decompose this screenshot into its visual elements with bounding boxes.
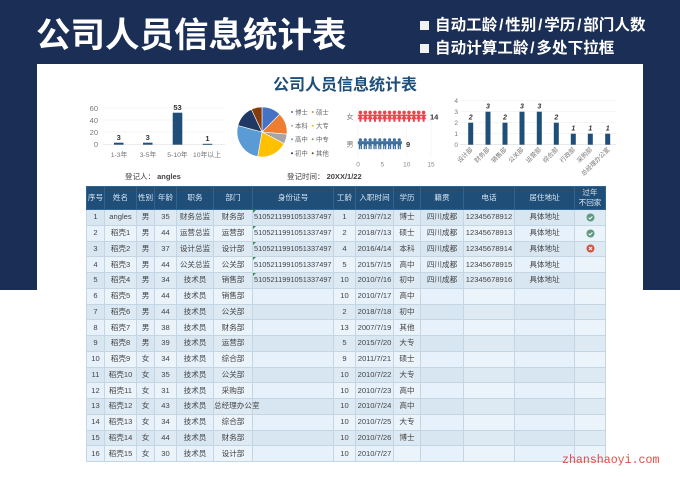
row 9: 2015/7/20 [358, 338, 391, 347]
chart: years of service bar chart: 60 [90, 104, 98, 113]
row 6: 2010/7/17 [358, 291, 391, 300]
table header row: 居住地址 [529, 193, 560, 202]
row 1: 1 [342, 212, 347, 221]
row 6: 销售部 [222, 291, 244, 300]
row 5: 技术员 [184, 275, 206, 284]
row 2: 运营总监 [180, 228, 210, 237]
row 12: 12 [91, 386, 100, 395]
chart: department headcount bars: 公关部 [507, 146, 525, 165]
row 14: 女 [142, 417, 149, 426]
row 10: 综合部 [222, 354, 244, 363]
row 2: 2 [342, 228, 347, 237]
row 13 [87, 399, 605, 414]
navy header background [0, 0, 680, 290]
table header row: 入职时间 [359, 193, 390, 202]
row 15: 44 [161, 433, 170, 442]
row 8: 财务部 [222, 323, 244, 332]
row 2: 5105211991051337497 [254, 228, 332, 237]
chart: department headcount bars: 总经理办公室 [580, 146, 611, 178]
chart: department headcount bars: 3 [520, 104, 524, 110]
row 7: 44 [161, 307, 170, 316]
row 4: 四川成都 [427, 260, 457, 269]
row 8 [87, 320, 605, 335]
row 14: 大专 [399, 417, 415, 426]
row 3: 男 [142, 244, 149, 253]
row 6: 6 [93, 291, 98, 300]
row 13: 13 [91, 401, 100, 410]
table header row: 籍贯 [434, 193, 450, 202]
row 3: 12345678914 [466, 244, 512, 253]
row 16 [87, 446, 605, 461]
row 3: 四川成都 [427, 244, 457, 253]
row 6: 男 [142, 291, 149, 300]
row 11: 公关部 [222, 370, 244, 379]
chart: department headcount bars: 2 [468, 114, 473, 122]
row 11: 11 [92, 370, 99, 379]
row 1: 2019/7/12 [358, 212, 391, 221]
row 12: 31 [161, 386, 170, 395]
row 15: 稻壳14 [109, 433, 132, 442]
row 7: 男 [142, 307, 149, 316]
row 4: 男 [142, 260, 149, 269]
row 14: 稻壳13 [109, 417, 132, 426]
row 3: 3 [93, 244, 98, 253]
row 12 [87, 383, 605, 398]
chart: years of service bar chart: 40 [90, 116, 98, 125]
row 5: 34 [161, 275, 170, 284]
row 11: 技术员 [184, 370, 206, 379]
row 10: 稻壳9 [111, 354, 130, 363]
row 16: 10 [340, 449, 349, 458]
table header row: 工龄 [337, 193, 352, 202]
pie legend [291, 107, 329, 158]
row 1: 具体地址 [529, 212, 560, 221]
row 13: 高中 [399, 401, 415, 410]
row 8: 2007/7/19 [358, 323, 391, 332]
row 10: 34 [161, 354, 170, 363]
row 15: 10 [340, 433, 349, 442]
white sheet panel [37, 64, 643, 477]
row 14: 34 [161, 417, 170, 426]
row 7: 公关部 [222, 307, 244, 316]
chart: department headcount bars: 综合部 [541, 146, 560, 165]
row 7: 初中 [399, 307, 415, 316]
row 8: 其他 [399, 323, 415, 332]
row 1 [87, 210, 605, 225]
row 4: 稻壳3 [111, 260, 130, 269]
chart: years of service bar chart: 1-3年 [111, 150, 128, 159]
row 2: 四川成都 [427, 228, 457, 237]
row 9: 男 [142, 338, 149, 347]
chart: department headcount bars: 3 [454, 109, 458, 116]
row 5 [87, 273, 605, 288]
row 6 [87, 289, 605, 304]
row 10 [87, 352, 605, 367]
row 2: 12345678913 [466, 228, 512, 237]
table header row: 过年 [582, 188, 598, 197]
row 13: 技术员 [184, 401, 206, 410]
row 4: 高中 [399, 260, 415, 269]
chart: department headcount bars: 1 [454, 131, 458, 138]
pie legend: 其他 [316, 149, 329, 158]
row 11 [87, 368, 605, 382]
row 3: 设计总监 [180, 244, 210, 253]
row 9: 5 [342, 338, 347, 347]
table header row: 不回家 [579, 198, 601, 207]
row 3: 具体地址 [529, 244, 560, 253]
chart: education pie [237, 107, 287, 157]
row 9: 稻壳8 [111, 338, 130, 347]
row 2: 44 [161, 228, 170, 237]
chart: department headcount bars: 2 [553, 114, 558, 122]
row 1: 5105211991051337497 [254, 212, 332, 221]
row 5: 稻壳4 [111, 275, 130, 284]
pie legend: 硕士 [316, 107, 329, 116]
chart: years of service bar chart: 3-5年 [140, 150, 157, 159]
row 8: 技术员 [184, 323, 206, 332]
row 2: 稻壳1 [111, 228, 130, 237]
row 16: 稻壳15 [109, 449, 132, 458]
chart: years of service bar chart [90, 103, 225, 159]
row 9: 9 [93, 338, 98, 347]
row 7: 稻壳6 [111, 307, 130, 316]
row 11: 大专 [399, 370, 415, 379]
row 2 [87, 226, 605, 241]
row 12: 高中 [399, 386, 415, 395]
row 16: 30 [161, 449, 170, 458]
chart: department headcount bars: 1 [606, 126, 610, 132]
table header row: 部门 [225, 193, 241, 202]
row 6: 10 [340, 291, 349, 300]
row 10: 技术员 [184, 354, 206, 363]
row 9: 运营部 [222, 338, 244, 347]
table header row: 学历 [399, 193, 415, 202]
row 2: 硕士 [399, 228, 415, 237]
chart: gender pictogram: 5 [380, 162, 384, 168]
row 14: 2010/7/25 [358, 417, 391, 426]
pie legend: 本科 [295, 121, 308, 130]
row 1: 1 [93, 212, 98, 221]
row 13: 43 [161, 401, 170, 410]
chart: years of service bar chart: 3 [117, 133, 121, 142]
staff data table [86, 186, 606, 462]
row 8: 男 [142, 323, 149, 332]
row 9: 大专 [399, 338, 415, 347]
row 11: 35 [161, 370, 170, 379]
row 9: 技术员 [184, 338, 206, 347]
chart: department headcount bars: 财务部 [473, 146, 491, 165]
row 1: 财务总监 [180, 212, 210, 221]
row 12: 10 [340, 386, 349, 395]
row 14 [87, 415, 605, 430]
row 2: 运营部 [222, 228, 244, 237]
chart: years of service bar chart: 3 [146, 133, 150, 142]
chart: department headcount bars: 运营部 [524, 146, 543, 165]
chart: department headcount bars: 0 [454, 142, 458, 149]
row 12: 采购部 [222, 386, 244, 395]
row 7 [87, 305, 605, 319]
row 8: 稻壳7 [111, 323, 130, 332]
row 5: 12345678916 [466, 275, 512, 284]
chart: gender pictogram: 男 [346, 140, 354, 148]
row 3: 2016/4/14 [358, 244, 391, 253]
row 4: 公关部 [222, 260, 244, 269]
row 11: 女 [142, 370, 149, 379]
row 14: 技术员 [184, 417, 206, 426]
chart: years of service bar chart: 0 [94, 140, 98, 149]
registration date: 登记时间： 20XX/1/22 [287, 172, 362, 181]
row 5: 初中 [399, 275, 415, 284]
row 6: 稻壳5 [111, 291, 130, 300]
chart: years of service bar chart: 5-10年 [167, 150, 188, 159]
sheet title: 公司人员信息统计表 [273, 77, 417, 94]
row 15 [87, 431, 605, 445]
row 10: 女 [142, 354, 149, 363]
row 6: 高中 [399, 291, 415, 300]
row 1: 财务部 [222, 212, 244, 221]
row 5: 四川成都 [427, 275, 457, 284]
chart: department headcount bars: 3 [537, 104, 541, 110]
feature bullet two: 自动计算工龄/多处下拉框 [435, 40, 614, 57]
table header row: 姓名 [113, 193, 128, 202]
row 16: 16 [91, 449, 100, 458]
row 16: 技术员 [184, 449, 206, 458]
row 15: 女 [142, 433, 149, 442]
row 16: 设计部 [222, 449, 244, 458]
chart: gender pictogram: 10 [403, 162, 411, 168]
chart: gender pictogram [346, 106, 439, 168]
row 1: 12345678912 [466, 212, 512, 221]
row 14: 14 [91, 417, 100, 426]
pie legend: 中专 [316, 135, 329, 144]
table header row: 序号 [88, 193, 103, 202]
table header row [87, 187, 605, 461]
row 7: 7 [93, 307, 98, 316]
row 4: 2015/7/15 [358, 260, 391, 269]
row 16: 2010/7/27 [358, 449, 391, 458]
chart: years of service bar chart: 20 [90, 128, 98, 137]
row 14: 10 [340, 417, 349, 426]
row 3: 设计部 [222, 244, 244, 253]
row 5: 销售部 [222, 275, 244, 284]
row 11: 2010/7/22 [358, 370, 391, 379]
row 11: 10 [340, 370, 349, 379]
row 5: 5105211991051337497 [254, 275, 332, 284]
row 10: 9 [342, 354, 347, 363]
row 3: 4 [342, 244, 347, 253]
row 3 [87, 242, 605, 256]
row 10: 2011/7/21 [358, 354, 391, 363]
row 15: 博士 [399, 433, 415, 442]
pie legend: 博士 [295, 107, 308, 116]
row 2: 具体地址 [529, 228, 560, 237]
row 6: 技术员 [184, 291, 206, 300]
row 4: 4 [93, 260, 98, 269]
table header row: 电话 [481, 193, 497, 202]
row 15: 技术员 [184, 433, 206, 442]
row 5: 具体地址 [529, 275, 560, 284]
row 3: 37 [161, 244, 170, 253]
row 3: 5105211991051337497 [254, 244, 332, 253]
row 5: 2010/7/16 [358, 275, 391, 284]
pie legend: 初中 [295, 149, 308, 158]
row 1: 35 [161, 212, 170, 221]
row 10: 10 [91, 354, 100, 363]
row 7: 2 [342, 307, 347, 316]
row 15: 15 [91, 433, 100, 442]
chart: years of service bar chart: 10年以上 [193, 150, 221, 159]
table header row: 性别 [138, 193, 153, 202]
chart: department headcount bars: 1 [571, 126, 575, 132]
row 1: 博士 [399, 212, 415, 221]
row 11: 稻壳10 [109, 370, 132, 379]
watermark: zhanshaoyi.com [562, 454, 659, 467]
row 4: 具体地址 [529, 260, 560, 269]
row 8: 38 [161, 323, 170, 332]
row 3: 稻壳2 [111, 244, 130, 253]
chart: department headcount bars: 销售部 [490, 146, 508, 165]
chart: department headcount bars: 设计部 [456, 146, 474, 165]
row 4: 12345678915 [466, 260, 512, 269]
row 4: 44 [161, 260, 170, 269]
table header row: 年龄 [158, 193, 173, 202]
chart: department headcount bars: 1 [588, 126, 592, 132]
row 1: 男 [142, 212, 149, 221]
row 1: angles [109, 212, 132, 221]
row 9: 39 [161, 338, 170, 347]
pie legend: 高中 [295, 135, 308, 144]
row 12: 技术员 [184, 386, 206, 395]
table header row: 身份证号 [278, 193, 308, 202]
chart: gender pictogram: 14 [430, 112, 439, 122]
row 16: 女 [142, 449, 149, 458]
row 3: 本科 [399, 244, 415, 253]
chart: department headcount bars: 3 [486, 104, 490, 110]
row 13: 女 [142, 401, 149, 410]
row 8: 13 [340, 323, 349, 332]
row 12: 2010/7/23 [358, 386, 391, 395]
row 10: 硕士 [399, 354, 415, 363]
chart: gender pictogram: 女 [346, 112, 354, 121]
row 7: 2018/7/18 [358, 307, 391, 316]
row 15: 财务部 [222, 433, 244, 442]
row 8: 8 [93, 323, 98, 332]
row 12: 女 [142, 386, 149, 395]
row 7: 技术员 [184, 307, 206, 316]
row 9 [87, 336, 605, 351]
row 13: 2010/7/24 [358, 401, 391, 410]
chart: years of service bar chart: 53 [173, 103, 182, 112]
row 4: 5105211991051337497 [254, 260, 332, 269]
chart: department headcount bars: 4 [454, 98, 458, 105]
row 13: 稻壳12 [109, 401, 132, 410]
row 13: 总经理办公室 [214, 401, 260, 410]
charts area [90, 98, 616, 178]
chart: gender pictogram: 15 [427, 162, 435, 168]
pie legend: 大专 [316, 121, 329, 130]
row 4: 公关总监 [180, 260, 210, 269]
registrar: 登记人： angles [125, 172, 181, 181]
row 13: 10 [340, 401, 349, 410]
row 4: 5 [342, 260, 347, 269]
row 1: 四川成都 [427, 212, 457, 221]
row 5: 10 [340, 275, 349, 284]
row 14: 综合部 [222, 417, 244, 426]
chart: department headcount bars [454, 98, 616, 178]
chart: gender pictogram: 0 [356, 162, 360, 168]
row 2: 2018/7/13 [358, 228, 391, 237]
row 5: 男 [142, 275, 149, 284]
row 2: 2 [93, 228, 98, 237]
chart: department headcount bars: 采购部 [575, 146, 594, 165]
female row [358, 111, 426, 122]
chart: department headcount bars: 2 [502, 114, 507, 122]
row 6: 44 [161, 291, 170, 300]
row 2: 男 [142, 228, 149, 237]
row 15: 2010/7/26 [358, 433, 391, 442]
table header row: 职务 [187, 193, 203, 202]
male row [358, 138, 402, 149]
feature bullet one: 自动工龄/性别/学历/部门人数 [435, 17, 646, 34]
chart: department headcount bars: 行政部 [558, 146, 577, 165]
row 12: 稻壳11 [109, 386, 132, 395]
row 5: 5 [93, 275, 98, 284]
chart: department headcount bars: 2 [454, 120, 458, 127]
chart: years of service bar chart: 1 [205, 134, 209, 143]
main banner title: 公司人员信息统计表 [36, 17, 346, 55]
row 4 [87, 257, 605, 272]
chart: gender pictogram: 9 [406, 140, 410, 149]
